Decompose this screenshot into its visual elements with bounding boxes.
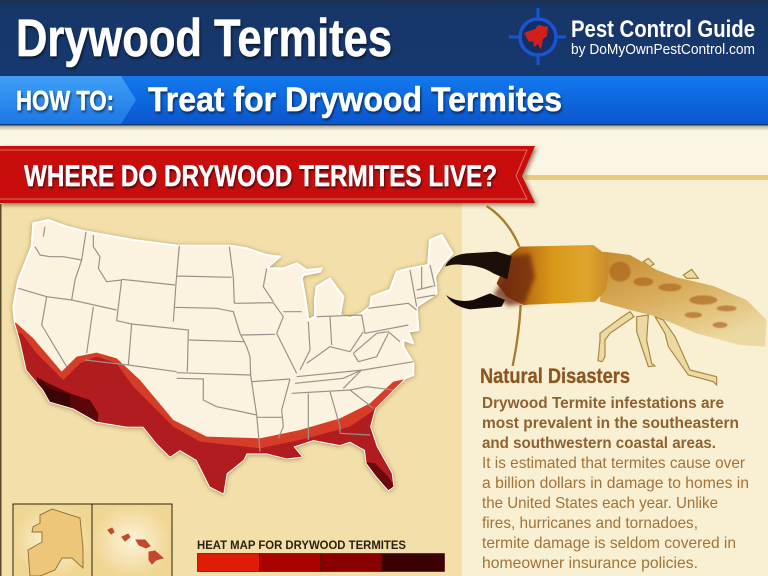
panel: termite text background (462, 180, 768, 576)
text block: body: a billion dollars in damage to homes in (482, 475, 749, 492)
termite illustration (445, 206, 767, 385)
map of United States heat zones (0, 220, 453, 500)
icon: logo crosshair (509, 8, 566, 65)
text block: lead: Drywood Termite infestations are (482, 395, 724, 412)
abdomen (600, 252, 767, 347)
abdomen mottling (609, 262, 737, 328)
panel: map background (0, 180, 462, 576)
text block: body: fires, hurricanes and tornadoes, (482, 515, 698, 532)
text block: body: homeowner insurance policies. (482, 555, 698, 572)
text block: lead: and southwestern coastal areas. (482, 435, 716, 452)
divider line (525, 175, 768, 180)
red banner (0, 146, 535, 203)
how to label: HOW TO: (16, 85, 114, 116)
mandibles (445, 252, 512, 279)
text block: body: It is estimated that termites cause over (482, 455, 746, 472)
banner heading: WHERE DO DRYWOOD TERMITES LIVE? (24, 160, 497, 193)
text block: lead (482, 395, 739, 452)
text block: body (482, 455, 749, 572)
legs (598, 258, 717, 385)
inset: Hawaii (92, 504, 172, 576)
head (497, 245, 609, 305)
text block: body: termite damage is seldom covered in (482, 535, 736, 552)
legend title: HEAT MAP FOR DRYWOOD TERMITES (197, 540, 406, 552)
antennae (487, 206, 521, 366)
shadow under blue bar (0, 125, 768, 131)
heat zones (14, 322, 404, 494)
left edge (0, 204, 2, 576)
logo byline: by DoMyOwnPestControl.com (571, 41, 755, 58)
inset: Alaska (13, 504, 92, 576)
panel: header bar (0, 0, 768, 76)
title: Drywood Termites (16, 9, 392, 68)
legend: heat scale (198, 554, 444, 572)
text block: body: the United States each year. Unlike (482, 495, 718, 512)
state lines (18, 227, 435, 452)
head dark base (493, 253, 535, 306)
how to heading: Treat for Drywood Termites (148, 81, 562, 119)
heading: natural disasters: Natural Disasters (480, 365, 630, 388)
panel: blue how-to bar (0, 76, 768, 126)
text block: lead: most prevalent in the southeastern (482, 415, 739, 432)
map base (13, 220, 453, 493)
